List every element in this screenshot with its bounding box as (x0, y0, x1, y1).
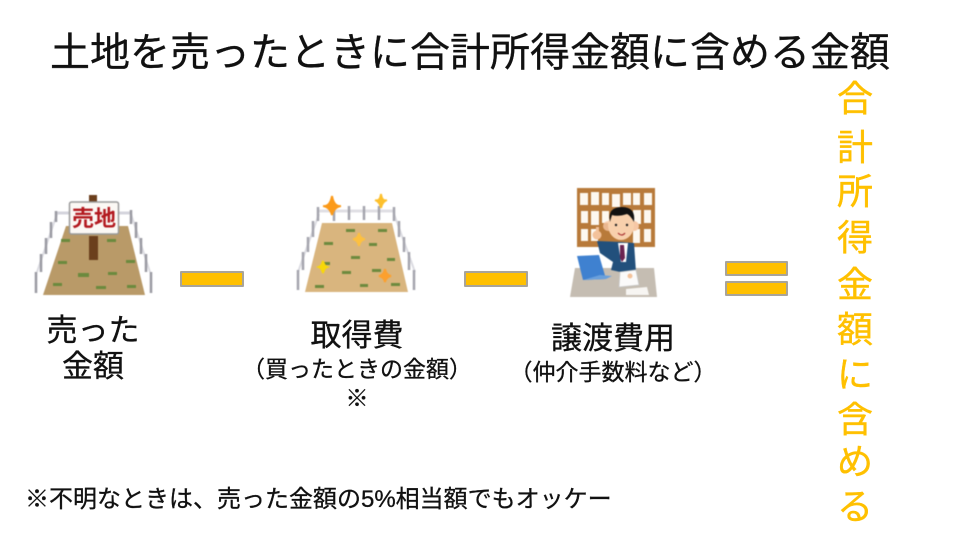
footnote: ※不明なときは、売った金額の5%相当額でもオッケー (25, 486, 612, 513)
label: sale price (46, 313, 140, 384)
vertical result label: 計 (837, 127, 873, 168)
vertical result label (837, 78, 873, 527)
icon: land for sale with sign: 売地 (72, 206, 116, 231)
vertical result label: に (837, 354, 873, 395)
icon: land with sparkles (296, 193, 416, 293)
label: sale price: 売った (46, 313, 140, 348)
title: 土地を売ったときに合計所得金額に含める金額 (50, 31, 890, 75)
vertical result label: 所 (837, 171, 873, 212)
label: transfer cost: 譲渡費用 (551, 321, 675, 356)
icon: land for sale with sign (34, 194, 153, 296)
vertical result label: 得 (837, 217, 873, 258)
label: sale price: 金額 (62, 349, 124, 384)
label: acquisition cost: 取得費 (310, 318, 404, 353)
minus bar 2 (464, 271, 528, 287)
equals sign (725, 261, 788, 296)
label: acquisition cost note: （買ったときの金額） (242, 356, 472, 382)
vertical result label: 金 (837, 264, 873, 305)
vertical result label: 含 (837, 399, 873, 440)
vertical result label: 合 (837, 78, 873, 119)
icon: man at desk in real estate office (570, 187, 658, 298)
label: reference mark: ※ (346, 385, 368, 411)
vertical result label: め (837, 441, 873, 482)
vertical result label: 額 (837, 309, 873, 350)
label: transfer cost note: （仲介手数料など） (510, 359, 716, 385)
minus bar 1 (180, 271, 244, 287)
vertical result label: る (837, 486, 873, 527)
